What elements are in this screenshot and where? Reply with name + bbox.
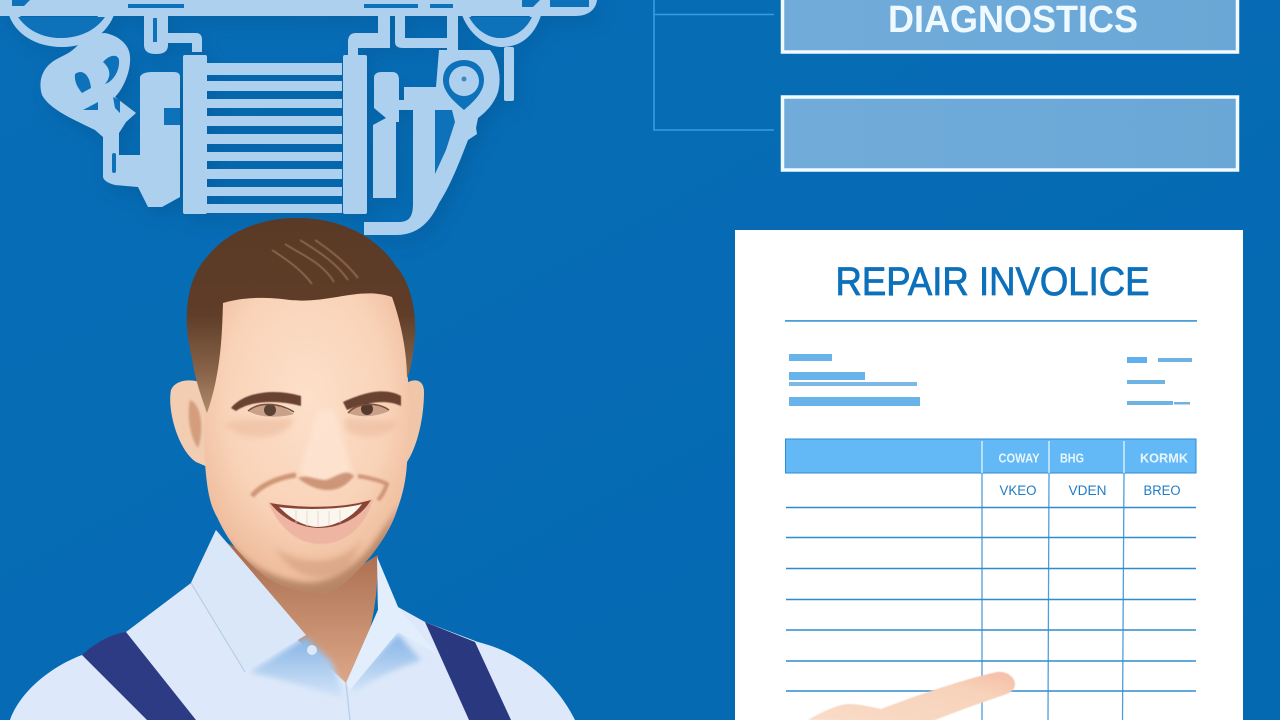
right ear — [404, 380, 424, 462]
radiator left tank — [183, 55, 207, 214]
table column lines — [982, 473, 1124, 720]
hair highlights — [272, 240, 358, 284]
pointing hand — [808, 672, 1015, 720]
right eye — [348, 403, 389, 416]
mouth — [268, 499, 373, 544]
first row labels: VKEO — [1000, 483, 1036, 498]
table header — [786, 439, 1196, 473]
left suspender — [82, 632, 196, 720]
collar right flap — [346, 557, 436, 690]
engine right rod — [504, 47, 514, 101]
shirt placket — [346, 683, 350, 720]
panel: empty button — [782, 97, 1238, 170]
panel: diagnostics button — [782, 0, 1238, 52]
right eyebrow — [343, 391, 401, 410]
header labels — [998, 452, 1188, 466]
collar edge — [191, 583, 245, 672]
shirt — [10, 530, 575, 720]
table row lines — [786, 508, 1196, 691]
engine cutouts — [12, 0, 589, 174]
first row labels: BREO — [1144, 483, 1180, 498]
invoice divider — [785, 320, 1197, 322]
connector lines — [654, 0, 774, 130]
neck — [217, 538, 378, 683]
engine gauge — [449, 66, 479, 96]
engine right column — [373, 72, 399, 198]
left ear shade — [189, 400, 201, 448]
header labels: KORMK — [1140, 452, 1188, 466]
man — [10, 218, 575, 720]
face — [204, 290, 409, 593]
engine left turbo blob and block — [40, 33, 180, 207]
panel: repair invoice — [735, 230, 1243, 720]
engine right ring — [461, 12, 542, 47]
engine left ring — [8, 12, 115, 47]
header labels: BHG — [1060, 452, 1084, 466]
engine right turbo and lower pipe — [364, 50, 500, 235]
first row labels — [1000, 483, 1180, 498]
radiator fins — [207, 63, 342, 213]
right suspender — [425, 622, 511, 720]
collar shadow left — [250, 637, 345, 700]
radiator right tank — [343, 55, 367, 214]
left eye — [248, 404, 294, 417]
face shading — [228, 412, 398, 593]
left ear — [170, 380, 210, 468]
invoice right details — [1127, 357, 1192, 405]
shirt button — [307, 645, 317, 655]
engine top manifold — [0, 0, 597, 16]
engine illustration — [0, 0, 597, 235]
collar left flap — [191, 530, 306, 672]
label: diagnostics: DIAGNOSTICS — [888, 0, 1138, 41]
invoice title: REPAIR INVOLICE — [836, 260, 1150, 304]
invoice table — [786, 439, 1196, 720]
hair — [187, 218, 415, 413]
header labels: COWAY — [998, 452, 1040, 466]
first row labels: VDEN — [1068, 483, 1106, 498]
left eyebrow — [231, 392, 301, 411]
engine right pipes — [348, 14, 458, 55]
invoice left details — [789, 354, 920, 406]
header column separators — [982, 441, 1124, 473]
collar shadow right — [352, 634, 421, 695]
engine left pipes — [144, 14, 202, 54]
